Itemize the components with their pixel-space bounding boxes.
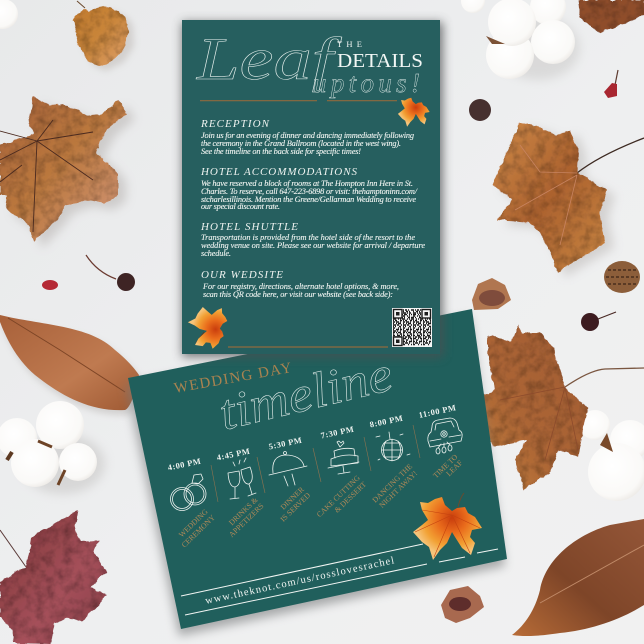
heading: up to us script: uptous! (313, 68, 420, 98)
heading: leaf script: Leaf (196, 26, 342, 92)
section: hotel accommodations: We have reserved a block of rooms at The Hompton Inn Here in St. (201, 179, 413, 188)
cotton: top left corner (0, 0, 18, 29)
section: hotel accommodations: Charles. To reserve, call 647-223-6898 or visit: thehamptoninn.com/ (201, 187, 418, 196)
heading: timeline script: timeline (213, 345, 398, 441)
timeline times: 8:00 PM (369, 414, 404, 429)
heading: wedding day: WEDDING DAY (173, 360, 293, 397)
card shadows (126, 316, 505, 636)
cotton boll lower right (580, 410, 644, 501)
section: our website: scan this QR code here, or visit our website (see back side): (203, 290, 393, 299)
timeline labels: NIGHT AWAY! (377, 469, 419, 510)
orange leaf right (493, 122, 644, 277)
timeline labels: LEAF (444, 458, 464, 478)
leaf: small amber top left (73, 1, 134, 71)
divider bottom (228, 346, 388, 348)
timeline labels: DRINKS & (227, 495, 260, 527)
section: hotel accommodations: HOTEL ACCOMMODATIONS (200, 166, 358, 178)
pine cone (604, 261, 640, 293)
timeline times: 4:00 PM (167, 457, 202, 472)
timeline labels: & DESSERT (332, 480, 368, 515)
panel: timeline card (128, 309, 507, 629)
orange leaf lower right (475, 325, 644, 490)
icon: maple leaf lower left (186, 303, 232, 352)
magnolia leaf right (512, 519, 644, 636)
QR code (392, 308, 432, 347)
berry right (581, 312, 616, 331)
card background (182, 20, 440, 354)
timeline labels: TIME TO (431, 452, 460, 480)
section: hotel accommodations: stcharlesillinois. Mention the Greene/Gellarman Wedding to receive (201, 195, 416, 204)
heading: details: DETAILS (337, 51, 423, 72)
timeline separators (211, 425, 420, 502)
icon: wedding rings (170, 474, 206, 510)
timeline labels (177, 452, 464, 549)
timeline labels: APPETIZERS (227, 501, 266, 539)
icon: large maple leaf (413, 493, 482, 560)
cotton boll top right (461, 0, 580, 80)
section: hotel shuttle: HOTEL SHUTTLE (200, 221, 298, 233)
leaf: large brown left (0, 97, 135, 248)
timeline labels: CAKE CUTTING (315, 473, 362, 519)
section: our website (201, 269, 399, 299)
dried rosebud right (472, 278, 511, 310)
section: reception: the ceremony in the Grand Ballroom (located in the west wing). (201, 139, 401, 148)
card background (128, 309, 507, 629)
section: reception: See the timeline on the back side for specific times! (201, 147, 361, 156)
section: reception (200, 118, 414, 156)
section: hotel shuttle: Transportation is provided from the hotel side of the resort to the (201, 233, 415, 242)
icon: serving cloche (269, 452, 307, 486)
cotton boll left (0, 401, 105, 494)
website url: www.theknot.com/us/rosslovesrachel (204, 555, 395, 607)
dried rose bottom (441, 586, 484, 623)
icon: small maple leaf top (398, 98, 430, 127)
section: hotel shuttle (200, 221, 425, 258)
dark berry (469, 99, 491, 121)
timeline times: 11:00 PM (418, 403, 457, 420)
timeline times: 7:30 PM (320, 425, 355, 440)
section: hotel accommodations (200, 166, 418, 211)
section: hotel accommodations: our special discount rate. (201, 202, 280, 211)
timeline labels: DANCING THE (370, 462, 414, 505)
divider top (200, 100, 397, 102)
icon: champagne glasses (228, 458, 256, 499)
panel: details card (182, 20, 440, 354)
section: hotel shuttle: schedule. (201, 249, 231, 258)
timeline labels: IS SERVED (278, 490, 312, 524)
section: our website: For our registry, directions, alternate hotel options, & more, (202, 282, 399, 291)
red petal left (42, 280, 58, 290)
icon: getaway car (428, 418, 462, 454)
section: hotel shuttle: wedding venue on site. Please see our website for arrival / departure (201, 241, 425, 250)
icon: disco ball (376, 432, 410, 461)
icon: wedding cake (328, 441, 359, 474)
section: reception: RECEPTION (200, 118, 270, 130)
section: reception: Join us for an evening of dinner and dancing immediately following (201, 131, 414, 140)
timeline times: 5:30 PM (268, 436, 303, 451)
heading: the: THE (337, 39, 362, 49)
timeline labels: CEREMONY (180, 513, 217, 549)
timeline times (167, 403, 457, 472)
berry with stem left (86, 255, 135, 291)
red maple leaf bottom left (0, 510, 107, 644)
website frame lines (181, 544, 498, 615)
red bud (604, 70, 618, 98)
timeline labels: WEDDING (177, 507, 210, 539)
section: our website: OUR WEDSITE (201, 269, 283, 281)
timeline times: 4:45 PM (216, 447, 251, 462)
magnolia leaf left (0, 315, 142, 415)
brown leaf top right (578, 0, 644, 33)
timeline labels: DINNER (279, 484, 306, 512)
shadow of details card (182, 22, 443, 357)
